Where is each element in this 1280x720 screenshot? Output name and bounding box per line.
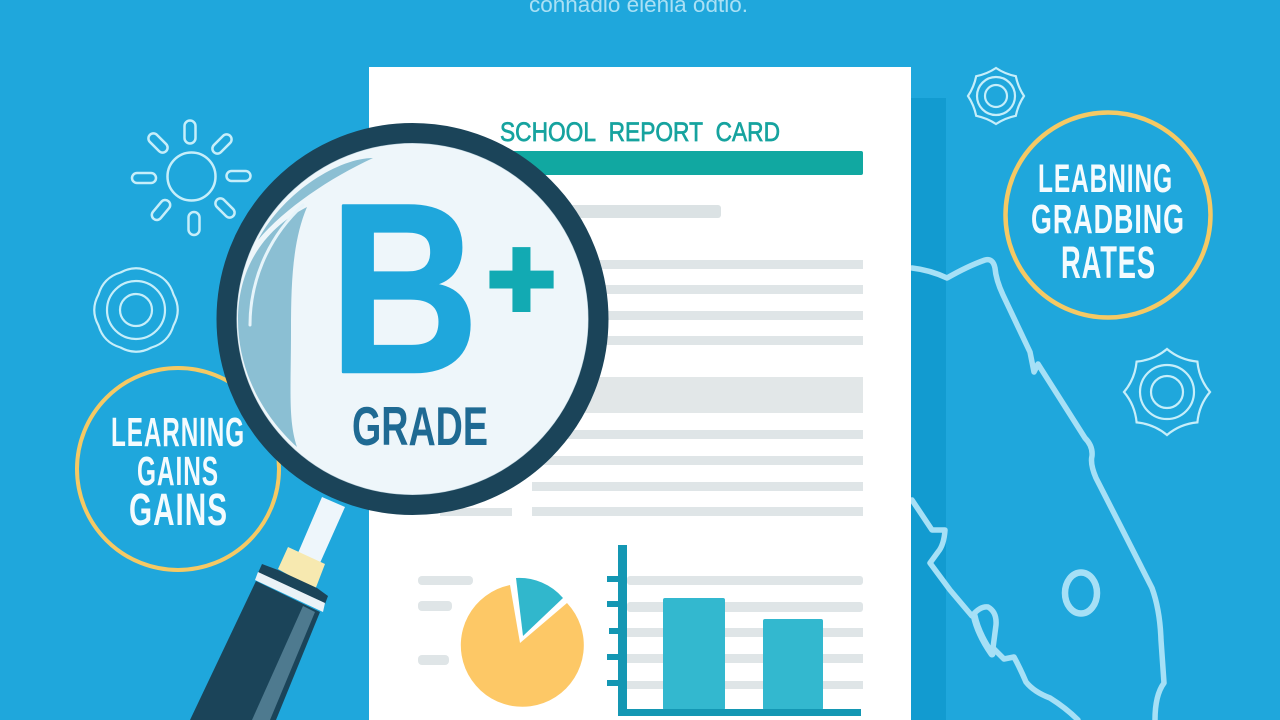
callout: grading rates: LEABNING — [1038, 157, 1173, 201]
title bar — [500, 151, 863, 175]
lens glare — [250, 205, 303, 325]
handle cap — [258, 564, 328, 604]
pie chart — [461, 578, 584, 707]
callout: grading rates: RATES — [1061, 237, 1156, 288]
lens edge — [236, 142, 589, 496]
paper shadow — [905, 98, 946, 720]
icon: sun — [132, 120, 250, 235]
report title: SCHOOL REPORT CARD — [500, 117, 780, 147]
panel: report card paper — [369, 67, 911, 720]
handle body — [190, 581, 320, 720]
callout: grading rates: GRADBING — [1031, 196, 1185, 242]
handle shaft — [298, 497, 345, 563]
callout: learning gains: LEARNING — [111, 409, 245, 455]
handle highlight — [252, 606, 315, 720]
grade label: GRADE — [352, 395, 488, 457]
pie chart legend — [418, 576, 473, 665]
lens ring — [226, 133, 598, 505]
handle band — [255, 572, 325, 612]
grade letter: B — [329, 154, 479, 424]
grade plus: + — [487, 213, 556, 345]
text lines — [440, 205, 863, 516]
bar chart — [607, 545, 863, 716]
icon: right gear badge — [1124, 349, 1210, 435]
callout: grading rates — [1006, 112, 1210, 318]
icon: left gear badge — [94, 268, 178, 352]
lens shade — [238, 207, 307, 447]
callout: learning gains — [77, 368, 279, 570]
icon: top right gear badge — [968, 68, 1024, 124]
lens sliver — [258, 158, 373, 240]
map lake — [1065, 572, 1097, 614]
callout: learning gains: GAINS — [137, 448, 219, 494]
magnifying glass — [190, 133, 598, 720]
map outline: Florida — [912, 260, 1164, 720]
callout: learning gains: GAINS — [129, 484, 228, 535]
lens — [234, 141, 590, 497]
handle collar — [278, 547, 325, 590]
